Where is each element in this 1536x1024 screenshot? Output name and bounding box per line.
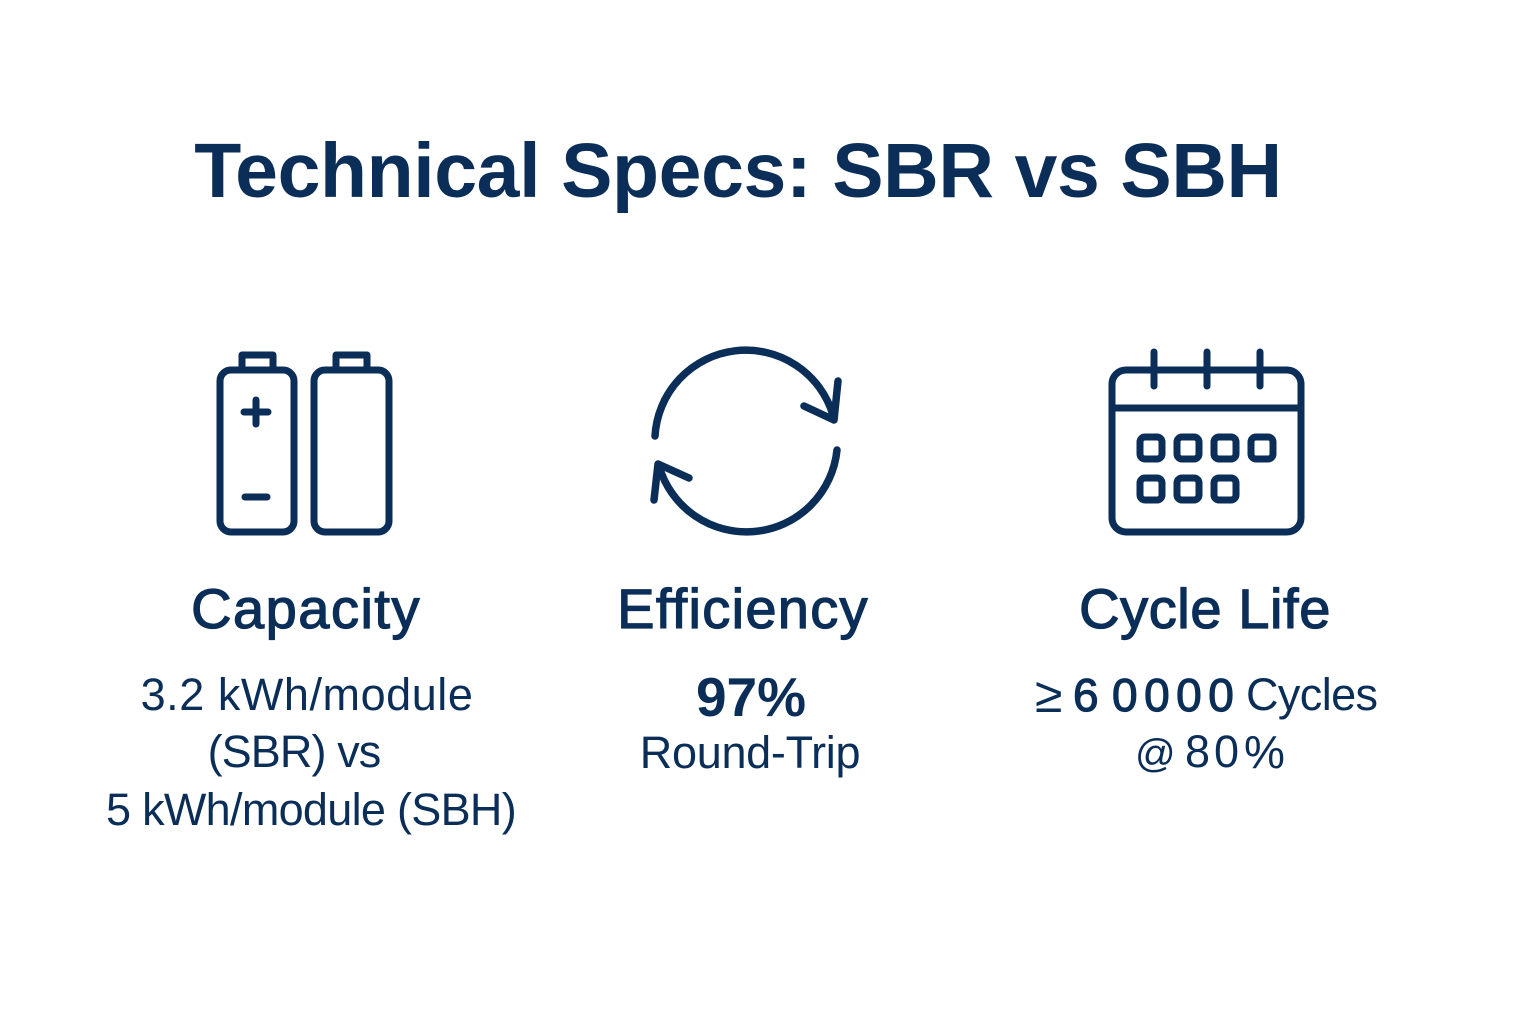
text: cycle life values: 6 — [1073, 669, 1099, 721]
text: cycle life values — [1035, 667, 1377, 778]
text: cycle life values: Cycles — [1246, 669, 1377, 720]
title: Technical Specs: SBR vs SBH — [194, 128, 1282, 214]
heading: cycle life: Cycle Life — [1079, 577, 1331, 640]
text: capacity values — [106, 669, 516, 835]
text: cycle life values: @ — [1135, 732, 1176, 776]
text: cycle life values: 80 — [1185, 726, 1243, 777]
heading: capacity: Capacity — [191, 577, 421, 640]
text: cycle life values: ≥ — [1035, 667, 1062, 723]
icon: batteries — [220, 355, 389, 532]
text: capacity values: 3.2 kWh/module — [141, 669, 473, 720]
icon: circular arrows — [654, 350, 838, 532]
text: efficiency label: Round-Trip — [640, 727, 860, 778]
text: cycle life values: % — [1244, 726, 1285, 778]
text: capacity values: 5 kWh/module (SBH) — [106, 784, 516, 835]
text: efficiency value: 97% — [696, 666, 806, 728]
text: cycle life values: 0000 — [1112, 669, 1240, 721]
text: capacity values: (SBR) vs — [208, 726, 380, 777]
heading: efficiency: Efficiency — [617, 577, 869, 640]
icon: calendar — [1112, 352, 1301, 532]
